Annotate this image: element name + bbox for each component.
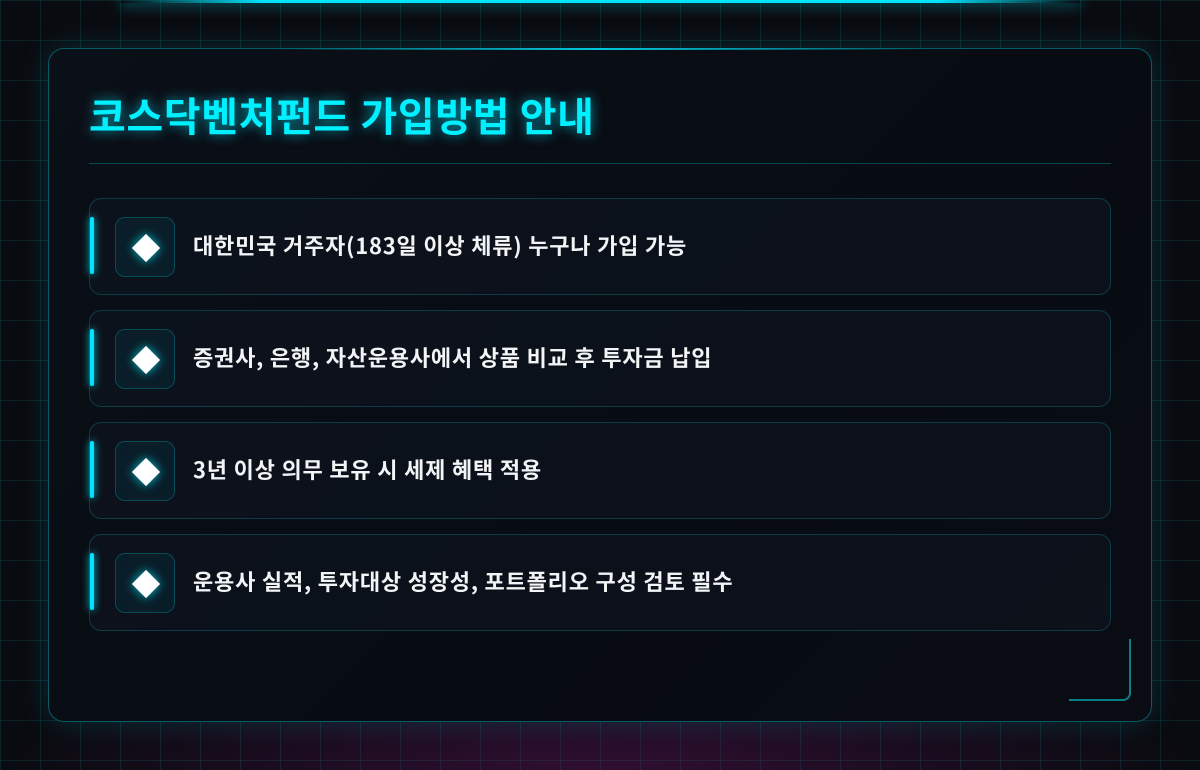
item 3 (89, 422, 1111, 519)
icon: diamond (115, 329, 175, 389)
icon: diamond (115, 441, 175, 501)
title: 코스닥벤처펀드 가입방법 안내 (89, 85, 595, 143)
text: 증권사, 은행, 자산운용사에서 상품 비교 후 투자금 납입 (193, 341, 712, 373)
icon: diamond (115, 553, 175, 613)
text: 대한민국 거주자(183일 이상 체류) 누구나 가입 가능 (193, 229, 687, 261)
icon: diamond (115, 217, 175, 277)
corner bracket (1069, 639, 1131, 701)
item 1 (89, 198, 1111, 295)
text: 운용사 실적, 투자대상 성장성, 포트폴리오 구성 검토 필수 (193, 565, 733, 597)
item 4 (89, 534, 1111, 631)
text: 3년 이상 의무 보유 시 세제 혜택 적용 (193, 453, 542, 485)
item 2 (89, 310, 1111, 407)
